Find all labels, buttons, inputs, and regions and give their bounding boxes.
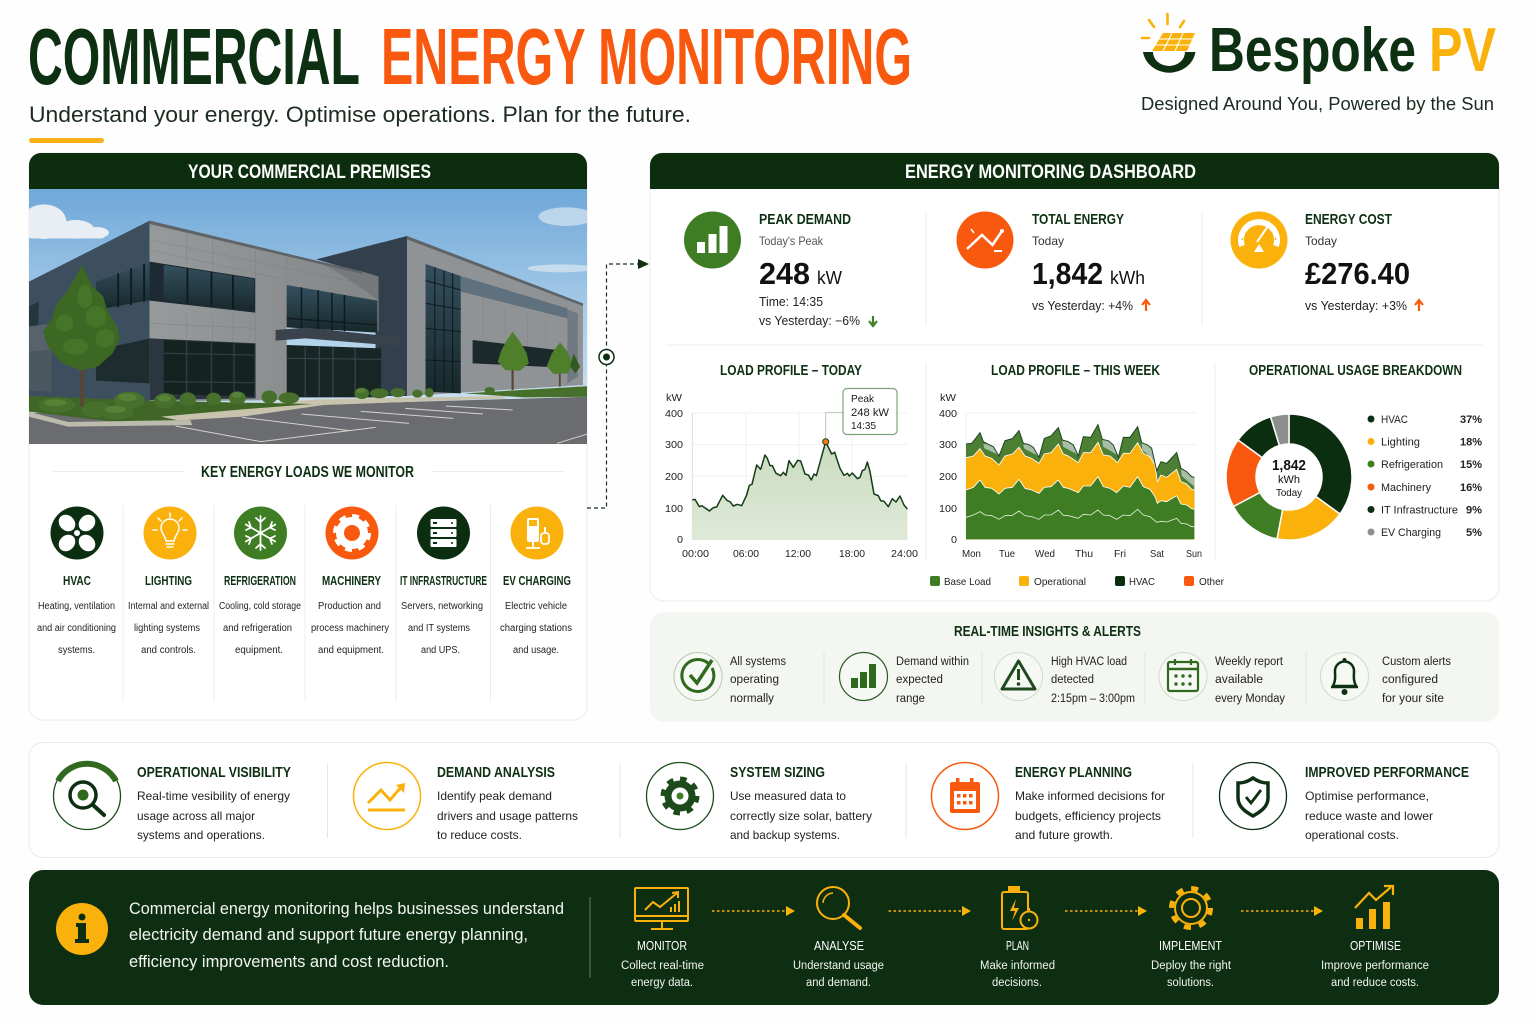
insight: custom alerts [1320,652,1451,705]
donut legend: 9% [1466,504,1482,516]
load: EV charging: EV CHARGING [503,574,571,588]
chart: load profile today: 18:00 [839,548,865,560]
benefit: operational visibility [54,762,291,842]
chart: load profile today: 300 [665,439,683,451]
KPI: peak demand: vs Yesterday: −6% [759,314,860,328]
peak marker [823,439,829,445]
load: lighting: Internal and external [128,601,209,612]
KPI: peak demand: Time: 14:35 [759,295,823,309]
load: EV charging: charging stations [500,623,572,634]
icon: down arrow [869,316,877,326]
insight: demand within range: Demand within [896,656,969,668]
load: HVAC: systems. [58,645,95,656]
benefit: system sizing: and backup systems. [730,828,840,842]
benefit: improved performance: Optimise performance, [1305,789,1429,803]
KPI: energy cost: vs Yesterday: +3% [1305,299,1407,313]
step: implement: Deploy the right [1151,960,1232,972]
step: plan: PLAN [1006,938,1029,953]
logo: Bespoke PV [1141,14,1496,114]
KPI: total energy: Today [1032,234,1064,248]
insight: weekly report: Weekly report [1215,656,1284,668]
benefit: operational visibility: usage across all major [137,809,255,823]
load: IT infrastructure: IT INFRASTRUCTURE [400,574,487,588]
right facade [407,236,583,396]
chart: load profile this week: 0 [951,534,957,546]
KPI: total energy: vs Yesterday: +4% [1032,299,1133,313]
trees [80,363,84,407]
peak callout: 14:35 [851,420,876,432]
chart: load profile today: 400 [665,408,683,420]
load: EV charging: Electric vehicle [505,601,567,612]
chart: load profile today: LOAD PROFILE – TODAY [720,363,862,379]
entrance canopy [276,328,376,344]
icon: trend line [956,212,1014,268]
benefit: system sizing: Use measured data to [730,789,846,803]
icon: gauge [1230,212,1288,268]
donut legend: Refrigeration [1381,459,1443,471]
insight: custom alerts: for your site [1382,693,1444,705]
benefit: system sizing: correctly size solar, battery [730,809,872,823]
dark side wing [29,221,150,403]
benefit: demand analysis [354,762,578,842]
insight: weekly report: every Monday [1215,693,1285,705]
insight: weekly report: available [1215,674,1263,686]
peak callout: Peak [851,393,875,405]
step: analyse: and demand. [806,977,871,989]
chart: load profile today: 24:00 [891,548,918,560]
donut centre total: Today [1276,487,1303,499]
step: plan: decisions. [992,977,1042,989]
KPI: peak demand: Today's Peak [759,234,824,248]
insight: demand within range: expected [896,674,943,686]
icon: calendar [1159,652,1207,700]
icon: EV charger [510,506,564,560]
insight: all systems normal: All systems [730,656,786,668]
icon: bell [1320,652,1368,700]
icon: shield [1220,762,1286,830]
heading: key energy loads: KEY ENERGY LOADS WE MONITOR [201,464,414,481]
panel: energy monitoring dashboard [650,153,1499,601]
donut legend: IT Infrastructure [1381,504,1458,516]
KPI: energy cost [1230,211,1423,313]
chart: load profile this week: LOAD PROFILE – THIS WEEK [991,363,1160,379]
icon: growth bars [1355,886,1393,929]
chart legend: Other [1199,576,1224,588]
insight: high HVAC load: detected [1051,674,1094,686]
step: monitor: Collect real-time [621,960,704,972]
arrow: analyse to plan [888,906,971,916]
load: HVAC: and air conditioning [37,623,116,634]
step: plan [980,887,1055,989]
donut chart [1226,414,1352,540]
benefit: demand analysis: to reduce costs. [437,828,522,842]
chart legend [930,576,1224,588]
benefit: system sizing: SYSTEM SIZING [730,764,825,781]
icon: up arrow [1142,300,1150,311]
donut centre total [1272,458,1306,499]
title [28,12,912,101]
panel heading: YOUR COMMERCIAL PREMISES [188,161,431,183]
donut legend: 16% [1460,482,1482,494]
front facade [150,221,379,402]
step: optimise: Improve performance [1321,960,1429,972]
load: lighting: lighting systems [134,623,200,634]
peak callout: 248 kW [851,407,890,419]
donut centre total: 1,842 [1272,458,1306,474]
step: optimise: OPTIMISE [1350,938,1401,953]
chart legend: HVAC [1129,576,1155,588]
KPI: total energy: kWh [1110,268,1145,288]
step: monitor [621,888,704,989]
logo tagline: Designed Around You, Powered by the Sun [1141,94,1494,114]
benefit: operational visibility: systems and operations. [137,828,265,842]
icon: outline gear [1172,888,1210,928]
shrubs [39,387,495,419]
chart: load profile this week: Wed [1035,548,1055,560]
icon: solar sun smile [1142,14,1196,73]
step: analyse: ANALYSE [814,938,864,953]
KPI: peak demand: 248 [759,256,810,291]
windows [96,263,150,310]
donut legend: 37% [1460,414,1482,426]
icon: server rack [417,506,470,560]
arrow: building to dashboard connector [587,259,649,508]
chart: load profile this week: Tue [999,548,1015,560]
step: analyse: Understand usage [793,960,884,972]
icon: magnifier with eye [54,762,120,830]
donut legend: Lighting [1381,436,1420,448]
title: COMMERCIAL [28,12,360,101]
step: implement [1151,888,1232,989]
KPI: energy cost: Today [1305,234,1337,248]
chart: load profile this week: 100 [939,503,957,515]
donut legend: 15% [1460,459,1482,471]
benefit: demand analysis: Identify peak demand [437,789,552,803]
chart: load profile this week: 200 [939,471,957,483]
icon: gear [326,506,378,560]
icon: orange calendar [932,762,998,830]
logo wordmark: PV [1429,16,1496,85]
benefit: improved performance: reduce waste and lower [1305,809,1433,823]
panel: real-time insights and alerts [650,612,1499,722]
icon: up arrow [1415,300,1423,311]
chart legend: Base Load [944,576,991,588]
benefit: energy planning: Make informed decisions for [1015,789,1165,803]
step: plan: Make informed [980,960,1055,972]
panel: benefits strip [29,742,1499,858]
dark centre block [316,236,407,396]
benefit: improved performance [1220,762,1469,842]
chart: operational usage breakdown: OPERATIONAL USAGE BREAKDOWN [1249,363,1462,379]
load: machinery: and equipment. [318,645,384,656]
step: monitor: MONITOR [637,938,687,953]
load: IT infrastructure [400,506,487,656]
donut centre total: kWh [1278,474,1300,486]
summary text [129,900,564,971]
load: machinery: Production and [318,601,381,612]
insight: all systems normal [674,652,786,705]
KPI: peak demand: kW [817,268,842,288]
donut legend: EV Charging [1381,527,1441,539]
panel heading: ENERGY MONITORING DASHBOARD [905,161,1196,183]
benefit: operational visibility: OPERATIONAL VISIBILITY [137,764,291,781]
benefit: energy planning: ENERGY PLANNING [1015,764,1132,781]
icon: light bulb [144,506,196,560]
chart legend: Operational [1034,576,1086,588]
icon: dark gear [646,762,714,830]
donut legend [1368,414,1482,539]
peak callout [843,388,897,434]
KPI: energy cost: ENERGY COST [1305,211,1392,228]
chart: load profile today: 200 [665,471,683,483]
title underline accent [29,138,104,143]
insight: high HVAC load [994,652,1135,705]
chart: load profile this week: Fri [1114,548,1126,560]
benefit: system sizing [646,762,872,842]
insight: all systems normal: operating [730,674,779,686]
load: machinery: MACHINERY [322,574,382,588]
arrow: plan to implement [1065,906,1147,916]
logo wordmark: Bespoke [1209,16,1416,85]
load: IT infrastructure: and IT systems [408,623,470,634]
insight: demand within range: range [896,693,925,705]
insight: weekly report [1159,652,1285,705]
icon: monitor [635,888,688,929]
summary text: electricity demand and support future energy planning, [129,926,528,944]
panel: footer process banner [29,870,1499,1005]
chart: load profile today: 100 [665,503,683,515]
chart: load profile this week: Sun [1186,548,1202,560]
load: machinery: process machinery [311,623,389,634]
chart: load profile today: 12:00 [785,548,811,560]
KPI: total energy [956,211,1150,313]
benefit: improved performance: operational costs. [1305,828,1399,842]
icon: fan [50,506,104,560]
load: HVAC [37,506,116,656]
ground, lawn and walkway [20,397,590,447]
load: refrigeration [219,506,301,656]
benefit: demand analysis: drivers and usage patterns [437,809,578,823]
chart: load profile today: 0 [677,534,683,546]
icon: magnifier [817,887,860,928]
arrow: implement to optimise [1241,906,1323,916]
benefit: energy planning: budgets, efficiency projects [1015,809,1161,823]
icon: battery clipboard [1002,887,1038,929]
chart: load profile this week: Mon [962,548,981,560]
icon: bars [684,212,741,268]
insight: high HVAC load: High HVAC load [1051,656,1127,668]
icon: amber trend [354,762,420,830]
load: EV charging: and usage. [513,645,559,656]
load: IT infrastructure: and UPS. [421,645,460,656]
summary text: Commercial energy monitoring helps businesses understand [129,900,564,918]
donut legend: HVAC [1381,414,1408,426]
insight: demand within range [840,652,969,705]
donut legend: 18% [1460,436,1482,448]
panel: your commercial premises [20,153,598,720]
subtitle: Understand your energy. Optimise operations. Plan for the future. [29,102,691,127]
chart: load profile today: kW [666,392,682,404]
insight: custom alerts: configured [1382,674,1438,686]
load: refrigeration: and refrigeration [223,623,292,634]
KPI: peak demand: PEAK DEMAND [759,211,851,228]
load: refrigeration: equipment. [235,645,283,656]
insight: all systems normal: normally [730,693,774,705]
step: monitor: energy data. [631,977,693,989]
insight: high HVAC load: 2:15pm – 3:00pm [1051,693,1135,705]
icon: warning triangle [994,652,1042,700]
chart: operational usage breakdown [1226,363,1482,540]
step: analyse [793,887,884,989]
chart: load profile this week: kW [940,392,956,404]
benefit: energy planning: and future growth. [1015,828,1113,842]
step: implement: solutions. [1167,977,1214,989]
load: machinery [311,506,389,656]
chart: load profile this week: Sat [1150,548,1164,560]
KPI: energy cost: £276.40 [1305,256,1410,291]
donut legend: Machinery [1381,482,1431,494]
chart: load profile today: 00:00 [682,548,709,560]
summary text: efficiency improvements and cost reduction. [129,953,449,971]
benefit: energy planning [932,762,1165,842]
chart: load profile today: 06:00 [733,548,759,560]
chart: load profile this week: 300 [939,439,957,451]
icon: snowflake [234,506,287,560]
icon: bars [840,652,888,700]
chart: load profile today [665,363,918,560]
load: HVAC: HVAC [63,574,91,588]
insight: custom alerts: Custom alerts [1382,656,1451,668]
step: implement: IMPLEMENT [1159,938,1222,953]
chart: load profile this week: Thu [1075,548,1093,560]
step: optimise [1321,886,1429,989]
arrow: monitor to analyse [712,906,795,916]
photo: commercial building [20,187,598,447]
benefit: demand analysis: DEMAND ANALYSIS [437,764,555,781]
load: lighting: and controls. [141,645,196,656]
KPI: peak demand [684,211,877,328]
title: ENERGY MONITORING [381,12,912,101]
load: HVAC: Heating, ventilation [38,601,115,612]
panel: real-time insights and alerts: REAL-TIME INSIGHTS & ALERTS [954,624,1141,640]
benefit: improved performance: IMPROVED PERFORMANCE [1305,764,1469,781]
benefit: operational visibility: Real-time vesibility of energy [137,789,290,803]
load: lighting [128,506,209,656]
load: refrigeration: Cooling, cold storage [219,601,301,612]
donut legend: 5% [1466,527,1482,539]
step: optimise: and reduce costs. [1331,977,1419,989]
KPI: total energy: 1,842 [1032,256,1103,291]
load: IT infrastructure: Servers, networking [401,601,483,612]
icon: info [56,903,108,955]
KPI: total energy: TOTAL ENERGY [1032,211,1124,228]
chart: load profile this week [930,363,1224,588]
load: lighting: LIGHTING [145,574,192,588]
chart: load profile this week: 400 [939,408,957,420]
load: refrigeration: REFRIGERATION [224,574,296,588]
load: EV charging [500,506,572,656]
icon: check [674,652,722,700]
